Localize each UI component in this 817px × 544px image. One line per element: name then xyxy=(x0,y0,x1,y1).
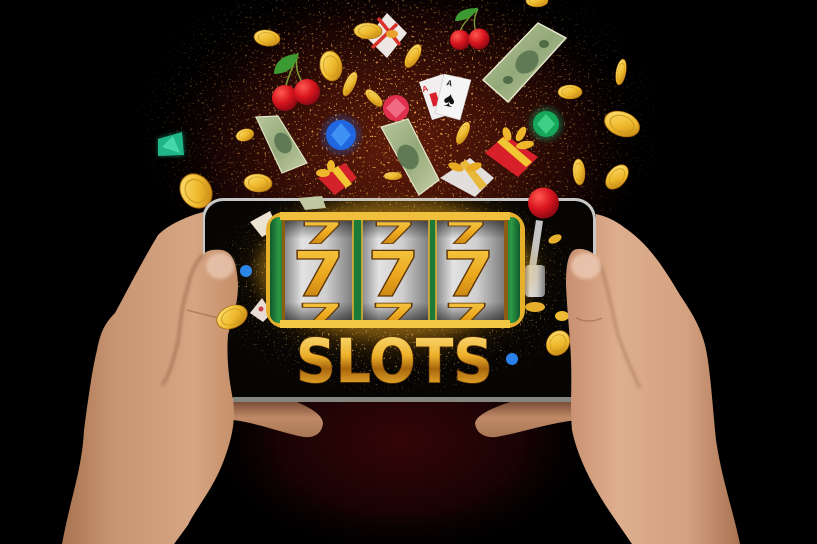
playing cards: A xyxy=(446,78,454,88)
finger under phone left xyxy=(233,402,323,437)
playing cards xyxy=(419,74,471,120)
reel 3: 7 xyxy=(442,238,495,311)
white gift center xyxy=(440,158,494,197)
reel 1: 7 xyxy=(292,238,345,311)
reel 3 xyxy=(436,221,504,320)
right hand xyxy=(566,214,740,544)
reel 2: 7 xyxy=(372,217,416,251)
slot machine reels xyxy=(256,202,536,338)
SLOTS title: SLOTS xyxy=(296,326,493,397)
left hand xyxy=(62,212,238,544)
slot machine lever xyxy=(525,188,559,297)
playing cards: ♠ xyxy=(441,87,458,112)
white gift top xyxy=(354,13,407,58)
flying gold coins xyxy=(173,0,643,214)
gold sparkle particles xyxy=(139,0,661,218)
red gift right xyxy=(485,125,538,177)
screen glow xyxy=(205,201,593,398)
cherries left xyxy=(272,53,320,111)
playing cards: A xyxy=(421,84,429,94)
phone xyxy=(202,196,596,402)
reel 2 xyxy=(362,221,428,320)
reel 3: 7 xyxy=(444,298,490,334)
cherries right xyxy=(450,8,490,50)
finger under phone right xyxy=(475,402,578,437)
reel 2: 7 xyxy=(367,238,420,311)
gems xyxy=(158,95,563,156)
reel 1 xyxy=(285,221,352,320)
reel 1: 7 xyxy=(298,298,344,334)
coin over left thumb xyxy=(213,300,251,334)
reel 3: 7 xyxy=(444,217,488,251)
reel 2: 7 xyxy=(371,298,417,334)
flying dollar bills xyxy=(256,23,566,195)
reel 1: 7 xyxy=(300,217,344,251)
small screen items xyxy=(240,196,574,365)
red gift left xyxy=(316,160,357,195)
